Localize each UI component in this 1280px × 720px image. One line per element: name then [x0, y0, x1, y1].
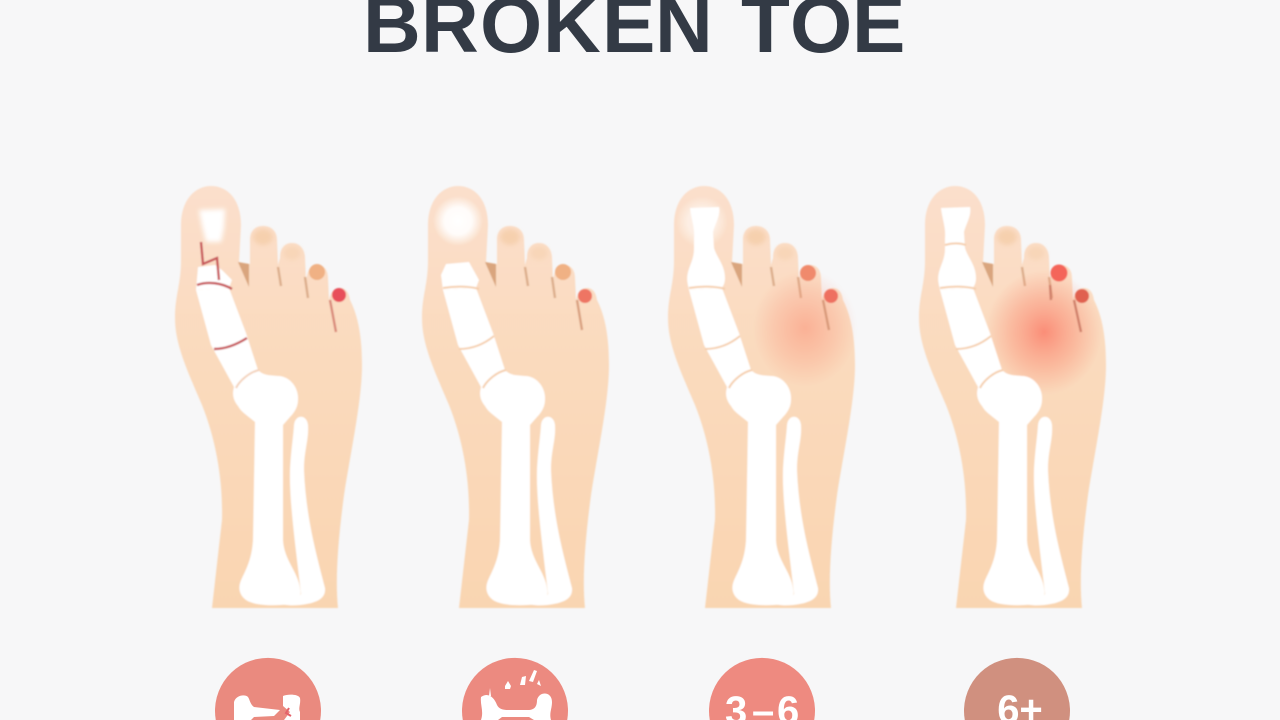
badge 2: cracked bone icon with fragments — [462, 658, 568, 720]
toe gap — [823, 300, 829, 330]
toenail: fourth toe — [800, 265, 816, 281]
joint lines — [940, 244, 1003, 388]
fractured toe bone piece — [196, 265, 232, 290]
joint lines — [443, 287, 506, 388]
badge 1: broken bone icon — [215, 658, 321, 720]
glowing distal bone — [433, 196, 483, 246]
foot 4: stronger swelling — [919, 186, 1106, 608]
badge 3: 3-6 — [709, 658, 815, 720]
foot 1: fracture with visible crack lines — [175, 186, 362, 608]
crack mark — [286, 708, 291, 716]
distal bone — [199, 209, 225, 242]
soft glow around distal bone — [676, 196, 728, 248]
joint line — [236, 370, 259, 388]
toenail: fourth toe — [555, 264, 571, 280]
joint lines — [689, 287, 752, 388]
swelling glow — [986, 270, 1102, 394]
toenail: fifth toe — [332, 288, 346, 302]
icon: broken bone right piece — [283, 695, 300, 720]
toenail: fourth toe — [1050, 264, 1068, 282]
icon: bone — [481, 693, 552, 720]
foot 3: mild swelling — [668, 186, 857, 608]
crack lines — [197, 242, 247, 349]
toe gap — [1050, 285, 1081, 332]
toenail: fifth toe — [1075, 289, 1089, 303]
swelling glow — [753, 270, 857, 386]
toenail: fifth toe — [578, 289, 592, 303]
toenail: fifth toe — [824, 289, 838, 303]
foot 2: healing without swelling — [422, 186, 609, 608]
toenail: fourth toe — [309, 264, 325, 280]
phalanx — [441, 262, 479, 290]
toe gap: red — [330, 300, 336, 332]
icon: broken bone left piece — [234, 695, 280, 720]
badge 4: 6+ — [964, 658, 1070, 720]
toe gap — [577, 300, 582, 330]
icon: fragments — [489, 670, 541, 696]
